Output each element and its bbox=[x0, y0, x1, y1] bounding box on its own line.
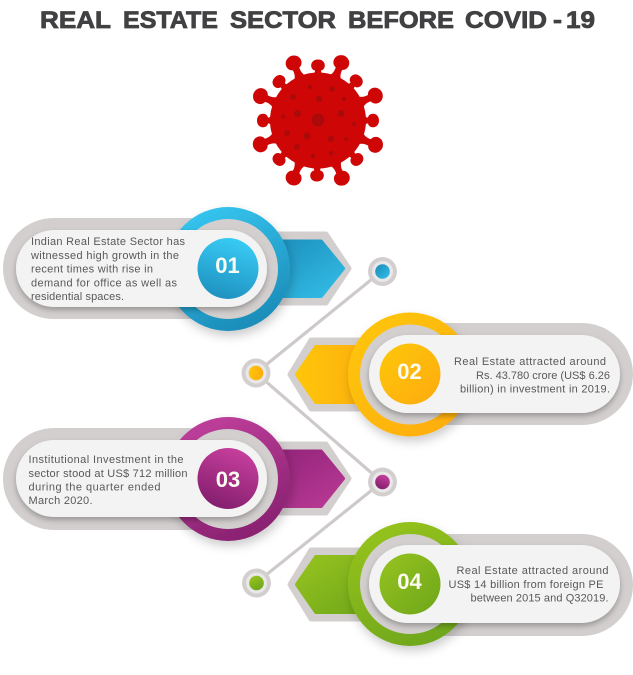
title: SECTOR bbox=[230, 7, 336, 34]
text 03: March 2020. bbox=[28, 495, 92, 507]
text 03: Institutional Investment in the bbox=[28, 454, 184, 466]
number 01 bbox=[198, 238, 258, 299]
number 04: 04 bbox=[397, 569, 422, 594]
number 01: 01 bbox=[215, 253, 240, 278]
title: - bbox=[553, 7, 562, 34]
title: ESTATE bbox=[123, 7, 218, 34]
arrow tab 04 bbox=[290, 550, 380, 619]
text 04 bbox=[448, 565, 608, 604]
text 03: sector stood at US$ 712 million bbox=[28, 468, 188, 480]
node: blue bbox=[368, 257, 397, 286]
number 03 bbox=[198, 448, 258, 509]
arrow tab 03 bbox=[260, 444, 349, 513]
text 03: during the quarter ended bbox=[28, 482, 160, 494]
connector lines bbox=[256, 271, 382, 583]
panel: 02 bbox=[290, 312, 633, 436]
text 01: Indian Real Estate Sector has bbox=[31, 236, 186, 248]
node: yellow bbox=[242, 358, 270, 388]
text 01: recent times with rise in bbox=[31, 264, 153, 276]
panel: 01 bbox=[3, 207, 349, 331]
panel: 04 bbox=[290, 522, 633, 646]
title: BEFORE bbox=[348, 7, 454, 34]
text 01: witnessed high growth in the bbox=[30, 250, 179, 262]
arrow tab 01 bbox=[260, 234, 349, 303]
number 02 bbox=[380, 344, 440, 404]
node: purple bbox=[368, 468, 397, 496]
text 02 bbox=[454, 356, 610, 396]
text 04: between 2015 and Q32019. bbox=[470, 592, 608, 604]
arrow tab 02 bbox=[290, 340, 380, 409]
number 03: 03 bbox=[216, 467, 240, 492]
text 01 bbox=[30, 236, 186, 303]
text 01: demand for office as well as bbox=[31, 278, 178, 290]
number 04 bbox=[380, 554, 440, 614]
title bbox=[40, 7, 595, 34]
number 02: 02 bbox=[397, 359, 422, 384]
icon: coronavirus bbox=[250, 53, 386, 188]
text 01: residential spaces. bbox=[31, 291, 124, 303]
title: REAL bbox=[40, 7, 111, 34]
text 04: US$ 14 billion from foreign PE bbox=[448, 579, 604, 591]
text 02: Real Estate attracted around bbox=[454, 356, 606, 368]
node: green bbox=[242, 568, 271, 598]
title: COVID bbox=[465, 7, 547, 34]
panel: 03 bbox=[3, 417, 349, 541]
text 04: Real Estate attracted around bbox=[456, 565, 608, 577]
text 02: Rs. 43.780 crore (US$ 6.26 bbox=[476, 370, 610, 382]
text 03 bbox=[28, 454, 188, 507]
title: 19 bbox=[566, 7, 595, 34]
text 02: billion) in investment in 2019. bbox=[460, 384, 610, 396]
